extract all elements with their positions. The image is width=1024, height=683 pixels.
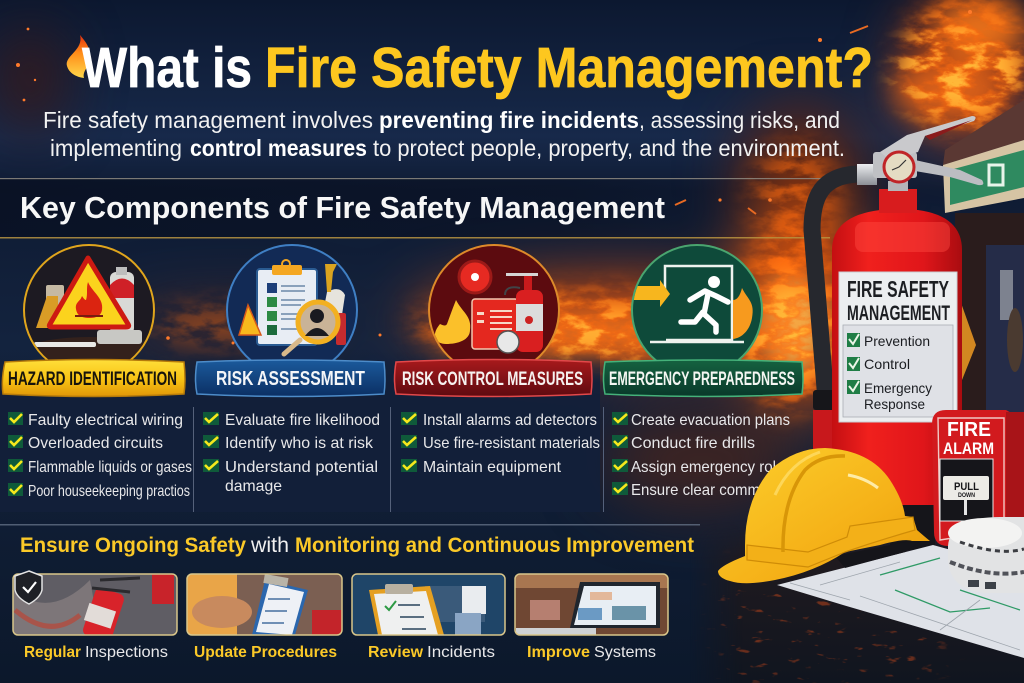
heading: ongoing safety xyxy=(20,534,694,557)
title: Fire Safety Management? xyxy=(265,36,873,100)
checklist: hazards: Faulty electrical wiring xyxy=(28,412,183,429)
component: risk assessment xyxy=(196,245,385,495)
illustration: fire alarm pull station: ALARM xyxy=(943,439,994,458)
lower lever xyxy=(915,160,983,185)
illustration: floor plan blueprint xyxy=(777,545,1024,658)
illustration: fire alarm pull station: DOWN xyxy=(958,493,975,499)
icon: shield check xyxy=(15,571,42,604)
icon: alarm bell and extinguisher circle xyxy=(429,245,559,375)
dark ground at lower right xyxy=(712,537,1024,683)
illustration: fire extinguisher xyxy=(812,116,983,550)
banner: risk assessment: RISK ASSESSMENT xyxy=(216,368,365,390)
label plate: Emergency xyxy=(864,380,932,396)
thumbnail: incident clipboard xyxy=(352,574,505,635)
banner: emergency preparedness: EMERGENCY PREPAREDNESS xyxy=(609,369,795,390)
label: Improve xyxy=(527,644,590,661)
label plate xyxy=(839,272,957,422)
intro text: control measures xyxy=(190,135,367,161)
intro text: preventing fire incidents xyxy=(379,107,639,133)
hose xyxy=(812,174,857,400)
label plate: Control xyxy=(864,356,910,372)
checklist: control: Install alarms ad detectors xyxy=(423,412,597,429)
checklist: assessment xyxy=(203,412,380,495)
thumbnail: laptop dashboard xyxy=(515,574,668,635)
checklist: control: Maintain equipment xyxy=(423,459,562,476)
exit sign and building at right xyxy=(943,100,1024,513)
card: improve systems xyxy=(515,574,668,661)
intro text xyxy=(43,107,845,161)
illustration: fire alarm pull station: FIRE xyxy=(947,419,991,441)
heading: ongoing safety: Ensure Ongoing Safety xyxy=(20,534,246,557)
checklist: control: Use fire-resistant materials xyxy=(423,435,600,452)
component: emergency preparedness xyxy=(604,245,803,499)
heading: ongoing safety: Monitoring and Continuous Improvement xyxy=(295,534,694,557)
icon: title flame xyxy=(67,35,90,78)
label plate: FIRE SAFETY xyxy=(847,276,949,302)
fire fade below the banners xyxy=(0,352,600,382)
banner: hazard identification xyxy=(2,360,185,396)
label: Review xyxy=(368,644,424,661)
checklist: emergency: Ensure clear comm xyxy=(631,482,760,499)
heading: key components: Key Components of Fire Safety Management xyxy=(20,190,665,225)
icon: clipboard and magnifier circle xyxy=(227,245,357,375)
banner: risk control measures xyxy=(394,360,592,396)
card: update procedures xyxy=(187,574,342,661)
component: risk control measures xyxy=(394,245,600,476)
illustration: fire alarm pull station xyxy=(932,410,1024,546)
banner: emergency preparedness xyxy=(604,360,803,396)
illustration: smoke detector xyxy=(948,517,1024,593)
section divider lines xyxy=(0,178,830,526)
label: Incidents xyxy=(427,644,495,661)
nozzle connector xyxy=(857,164,877,185)
checklist: assessment: Identify who is at risk xyxy=(225,435,374,452)
icon: hazard circle xyxy=(23,244,155,360)
illustration: fire alarm pull station: PULL xyxy=(954,481,979,493)
component: hazard identification xyxy=(2,245,192,500)
card: review incidents xyxy=(352,574,505,661)
label plate: Response xyxy=(864,396,925,412)
label: Systems xyxy=(594,644,656,661)
label: Inspections xyxy=(85,644,168,661)
title xyxy=(67,35,873,100)
checklist: hazards: Overloaded circuits xyxy=(28,435,163,452)
intro text: Fire safety management involves xyxy=(43,107,373,133)
checklist: assessment: Understand potential xyxy=(225,459,378,476)
card: regular inspections xyxy=(13,571,177,661)
title: What is xyxy=(82,36,252,100)
checklist: emergency: Conduct fire drills xyxy=(631,435,755,452)
icon: emergency exit circle xyxy=(632,245,762,375)
thumbnail: extinguisher inspection xyxy=(13,571,177,643)
checklist: control xyxy=(401,412,600,476)
banner: hazard identification: HAZARD IDENTIFICATION xyxy=(8,369,177,390)
label plate: Prevention xyxy=(864,333,930,349)
banner: risk control measures: RISK CONTROL MEASURES xyxy=(402,369,583,390)
checklist: hazards: Flammable liquids or gases xyxy=(28,459,192,476)
heading: ongoing safety: with xyxy=(250,534,289,557)
checklist: assessment: damage xyxy=(225,478,282,495)
thumbnail: updating checklist xyxy=(187,574,342,635)
embers scattered across the background xyxy=(16,10,972,344)
checklist: emergency xyxy=(612,412,790,499)
checklist: emergency: Create evacuation plans xyxy=(631,412,790,429)
checklist: emergency: Assign emergency rol xyxy=(631,459,776,476)
cylinder body xyxy=(832,210,962,514)
checklist: assessment: Evaluate fire likelihood xyxy=(225,412,380,429)
checklist: hazards: Poor houseekeeping practios xyxy=(28,483,190,500)
banner: risk assessment xyxy=(196,360,385,396)
top lever xyxy=(880,116,976,160)
illustration: yellow hard hat xyxy=(718,448,930,583)
label xyxy=(527,644,656,661)
label: Regular xyxy=(24,644,81,661)
checklist: hazards xyxy=(8,412,192,500)
intro text: , assessing risks, and xyxy=(639,107,840,133)
gauge xyxy=(884,152,914,182)
intro text: implementing xyxy=(50,135,182,161)
label xyxy=(368,644,495,661)
label: Update Procedures xyxy=(194,644,337,661)
intro text: to protect people, property, and the environment. xyxy=(373,135,845,161)
label xyxy=(24,644,168,661)
label plate: MANAGEMENT xyxy=(847,302,950,325)
dark band behind key components heading xyxy=(0,179,800,237)
